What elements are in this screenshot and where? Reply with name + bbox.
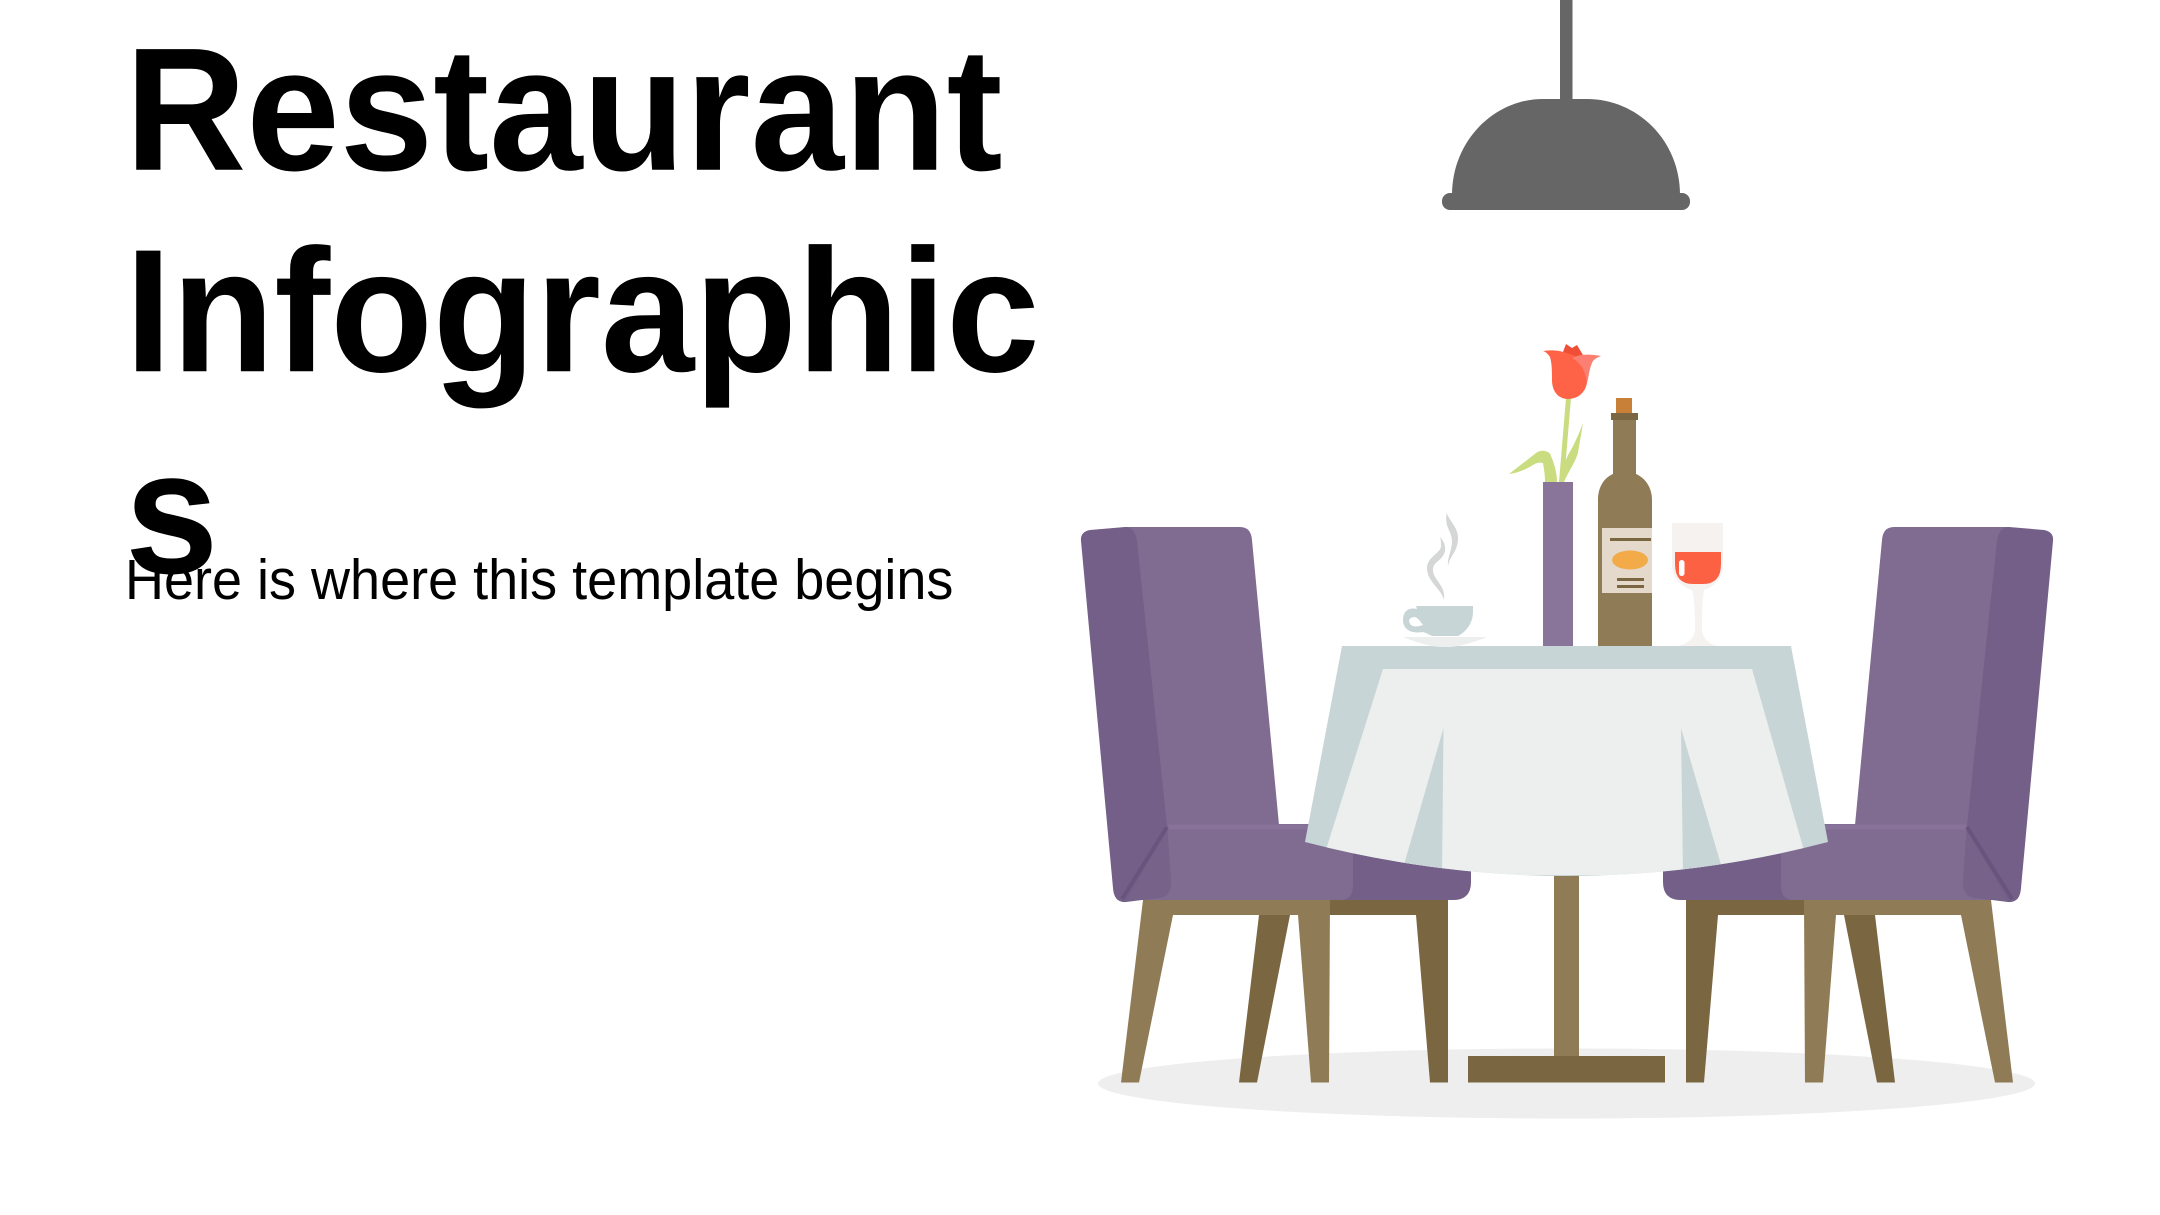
title: s [125, 414, 218, 610]
tulip [1509, 344, 1601, 482]
title [125, 11, 1040, 610]
wine bottle [1598, 398, 1652, 646]
bottle label [1602, 528, 1652, 593]
tablecloth [1305, 646, 1828, 876]
title: Infographic [125, 212, 1040, 408]
right chair [1663, 527, 2053, 1082]
stem and leaves [1509, 398, 1583, 482]
subtitle: Here is where this template begins [125, 549, 953, 612]
cup [1403, 606, 1473, 636]
steam [1427, 537, 1445, 600]
petals [1563, 344, 1583, 360]
left chair [1081, 527, 1471, 1082]
wine glass [1672, 523, 1723, 646]
saucer [1403, 637, 1487, 647]
coffee cup with steam [1403, 513, 1487, 647]
title: Restaurant [125, 11, 1003, 207]
ceiling lamp [1442, 0, 1690, 210]
table pedestal [1468, 870, 1665, 1082]
vase [1543, 482, 1573, 646]
illustration: dining scene [1080, 0, 2054, 1118]
floor shadow [1098, 1048, 2035, 1118]
